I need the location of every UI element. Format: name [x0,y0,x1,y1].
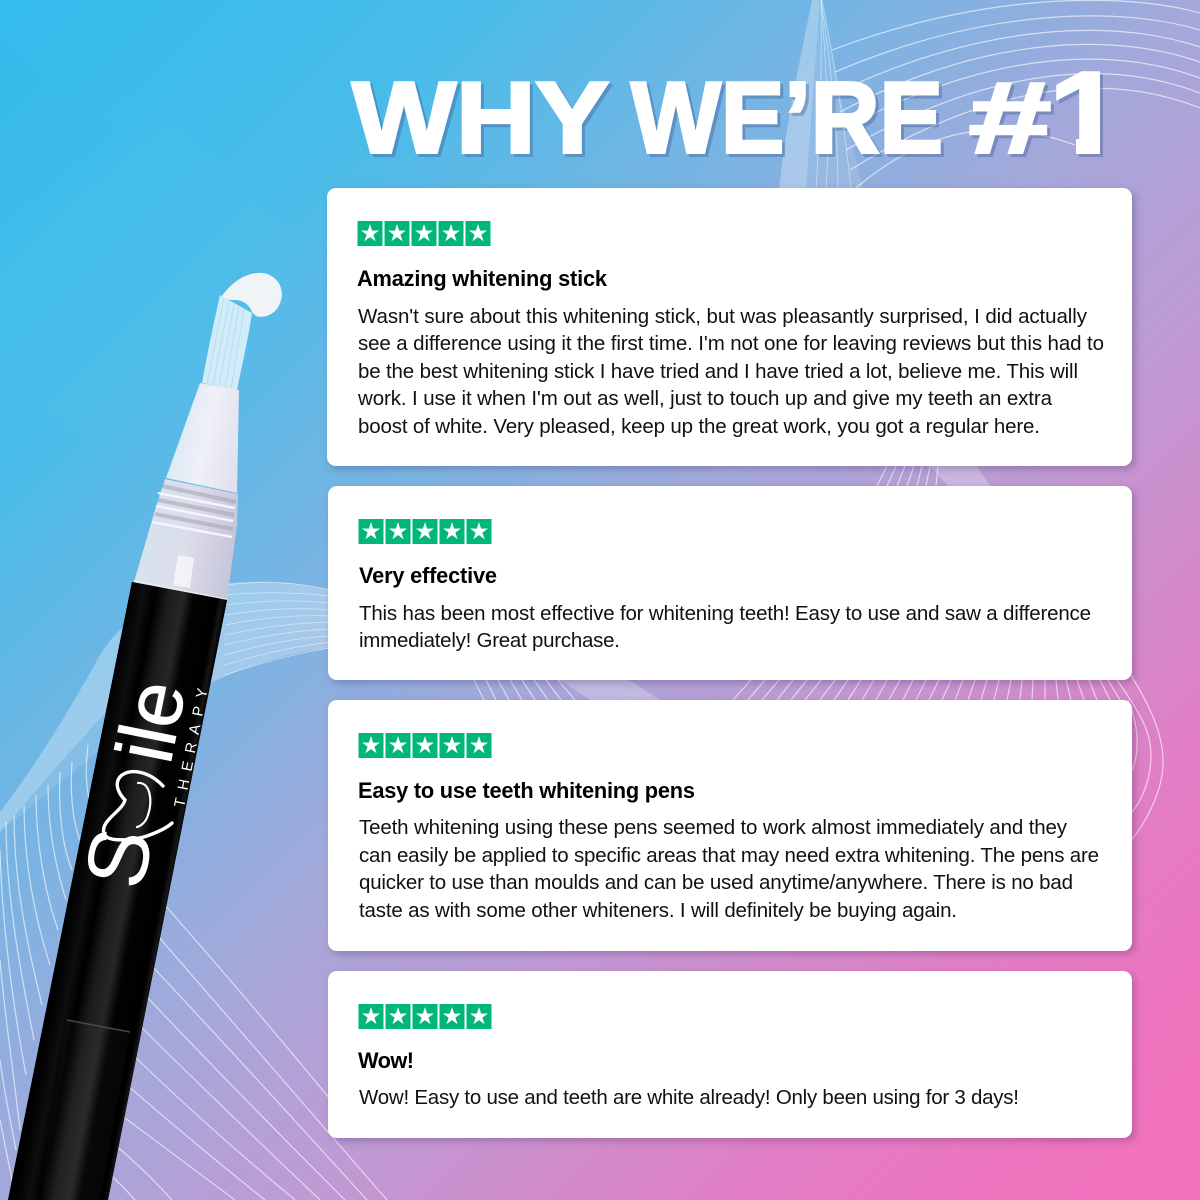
pen cone [166,383,239,493]
wave lines: right of third card [1117,669,1163,842]
wave lines: left of pen [0,582,330,1190]
review text [357,305,1104,438]
wave lines: top right [779,0,1200,190]
pen brush [202,295,252,390]
rating stars [358,221,490,246]
title [350,71,1103,157]
rating stars [358,519,492,544]
review text: immediately! Great purchase. [359,629,620,652]
title: 1 [1048,48,1126,178]
review text: can easily be applied to specific areas that may need extra whitening. The pens are [359,844,1099,867]
review text: taste as with some other whiteners. I will definitely be buying again. [359,899,957,922]
panel: review 3 [328,700,1132,951]
pen logo: Smile Therapy: S [66,821,172,896]
rating stars [358,1004,492,1029]
review text: quicker to use than moulds and can be used anytime/anywhere. There is no bad [359,871,1073,894]
panel: review 1 [327,188,1132,466]
pen black barrel [8,582,227,1200]
pen applicator tip [222,273,282,317]
pen logo: Smile Therapy [66,673,212,896]
review heading: Wow! [358,1048,414,1073]
review heading: Easy to use teeth whitening pens [358,778,695,803]
review heading: Amazing whitening stick [357,266,608,291]
review text: Wasn't sure about this whitening stick, but was pleasantly surprised, I did actually [358,305,1088,328]
review text: This has been most effective for whitening teeth! Easy to use and saw a difference [359,602,1091,625]
rating stars [358,733,492,758]
pen logo: Smile Therapy: THERAPY [171,687,212,809]
pen logo: Smile Therapy: ile [99,673,202,769]
logo tooth icon [104,772,172,840]
review heading: Very effective [359,563,497,588]
wave lines: gap below first card [877,466,990,486]
title: # [969,61,1051,174]
title: WHY [352,62,609,174]
review text: work. I use it when I'm out as well, just to touch up and give my teeth an extra [357,387,1053,410]
panel: review 4 [328,971,1132,1138]
review text: Teeth whitening using these pens seemed to work almost immediately and they [359,816,1068,839]
review text: see a difference using it the first time. I'm not one for leaving reviews but this had to [358,332,1104,355]
review text [359,816,1099,922]
review text: boost of white. Very pleased, keep up the great work, you got a regular here. [358,415,1040,438]
review text: be the best whitening stick I have tried and I have tried a lot, believe me. This will [358,360,1078,383]
title: WE’RE [631,62,943,174]
pen clear collar [134,479,238,600]
wave lines: gap below second card [474,680,1120,700]
wave lines: right of pen [110,903,387,1200]
review text: Wow! Easy to use and teeth are white already! Only been using for 3 days! [359,1086,1019,1109]
panel: review 2 [328,486,1132,680]
review text [359,602,1091,652]
product: whitening pen [8,273,282,1200]
